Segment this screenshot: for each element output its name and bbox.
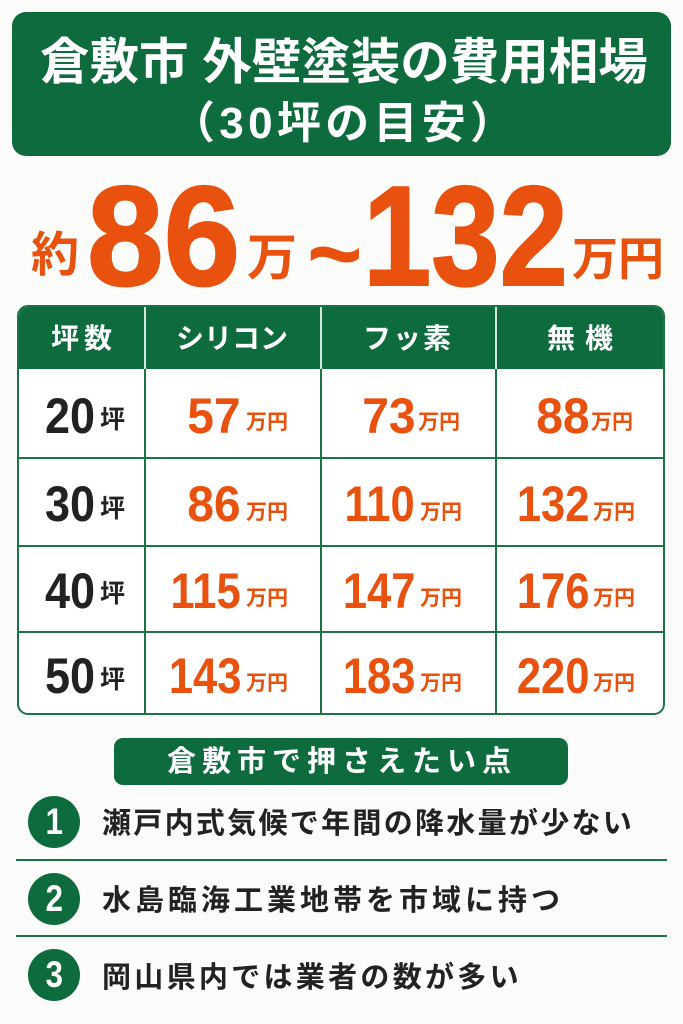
fluorine price: 147 <box>342 563 415 619</box>
prefix 約: 約 <box>31 229 79 282</box>
header: 坪数: 坪数 <box>51 323 117 354</box>
row 30坪: 万円 <box>420 501 462 524</box>
silicone price: 115 <box>171 563 241 619</box>
price range headline <box>31 157 664 316</box>
row 50坪: 万円 <box>420 672 462 695</box>
silicone price: 57 <box>188 388 241 444</box>
tilde: ~ <box>307 198 362 310</box>
row 40坪: 万円 <box>420 587 462 610</box>
high price unit: 万円 <box>572 233 664 285</box>
row 40坪 <box>45 563 635 619</box>
row 40坪: 万円 <box>246 587 288 610</box>
cost table <box>17 305 665 715</box>
number badge 2: 2 <box>45 878 63 919</box>
header: フッ素: フッ素 <box>363 323 453 354</box>
inorganic price: 220 <box>516 648 589 704</box>
row 20坪: 万円 <box>418 411 460 434</box>
inorganic price: 88 <box>537 388 590 444</box>
row label: 30 <box>45 476 95 532</box>
row 20坪: 万円 <box>246 411 288 434</box>
row 40坪: 坪 <box>100 580 125 608</box>
row 30坪: 坪 <box>100 495 125 523</box>
row 20坪: 万円 <box>591 411 633 434</box>
row 30坪 <box>45 476 635 532</box>
point 2 text: 水島臨海工業地帯を市域に持つ <box>102 885 564 917</box>
fluorine price: 183 <box>342 648 415 704</box>
title line 2: （30坪の目安） <box>171 99 518 148</box>
row 50坪: 万円 <box>593 672 635 695</box>
row 50坪: 万円 <box>246 672 288 695</box>
number badge 3: 3 <box>45 954 63 995</box>
row label: 50 <box>45 648 95 704</box>
key points heading <box>114 738 568 785</box>
inorganic price: 132 <box>516 476 589 532</box>
title line 1: 倉敷市 外壁塗装の費用相場 <box>40 35 648 90</box>
high price: 132 <box>363 157 568 316</box>
title banner <box>12 12 671 156</box>
fluorine price: 110 <box>345 476 415 532</box>
row label: 20 <box>45 388 95 444</box>
header: 無機: 無機 <box>547 323 623 354</box>
point 3 text: 岡山県内では業者の数が多い <box>102 962 522 994</box>
low price unit: 万 <box>247 230 297 286</box>
fluorine price: 73 <box>363 388 416 444</box>
low price: 86 <box>87 157 240 316</box>
point 3 <box>28 949 522 1001</box>
silicone price: 143 <box>168 648 241 704</box>
header: シリコン: シリコン <box>176 323 288 354</box>
inorganic price: 176 <box>516 563 589 619</box>
number badge 3 <box>28 949 80 1001</box>
number badge 1: 1 <box>45 801 63 842</box>
table header band <box>17 305 665 369</box>
number badge 1 <box>28 796 80 848</box>
point 2 <box>28 873 564 925</box>
number badge 2 <box>28 873 80 925</box>
row 20坪: 坪 <box>100 406 125 434</box>
row 50坪 <box>45 648 635 704</box>
point 1 text: 瀬戸内式気候で年間の降水量が少ない <box>102 808 634 840</box>
row 50坪: 坪 <box>100 666 125 694</box>
point 1 <box>28 796 634 848</box>
row 20坪 <box>45 388 633 444</box>
silicone price: 86 <box>188 476 241 532</box>
row 30坪: 万円 <box>593 501 635 524</box>
heading text: 倉敷市で押さえたい点 <box>167 746 517 778</box>
row 30坪: 万円 <box>246 501 288 524</box>
row 40坪: 万円 <box>593 587 635 610</box>
row label: 40 <box>45 563 95 619</box>
